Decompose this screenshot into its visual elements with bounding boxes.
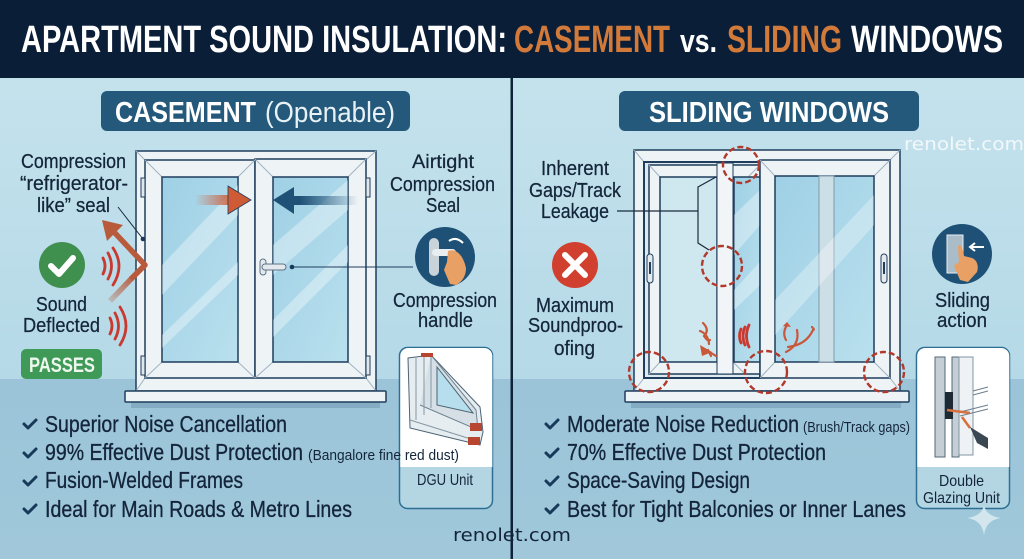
handle leader line xyxy=(290,265,413,269)
label: sound deflected: Sound xyxy=(36,294,87,316)
label: compression seal xyxy=(20,151,128,217)
sliding window xyxy=(625,150,909,408)
icon: compression handle xyxy=(415,227,475,287)
title banner: vs. xyxy=(680,23,717,59)
label: inherent gaps: Gaps/Track xyxy=(529,180,622,202)
arrow: deflected sound xyxy=(102,220,145,301)
icon: sound waves upper xyxy=(103,248,119,285)
label: maximum soundproofing xyxy=(528,295,623,360)
title banner: SLIDING xyxy=(727,19,842,61)
card: double glazing unit xyxy=(916,348,1010,508)
card: DGU unit: DGU Unit xyxy=(417,472,473,489)
feature list: sliding: 70% Effective Dust Protection xyxy=(567,439,826,465)
label: maximum soundproofing: Maximum xyxy=(536,295,614,317)
label: airtight seal: Airtight xyxy=(412,152,475,173)
arrow: blue compression arrow xyxy=(273,187,358,214)
feature list: casement: Superior Noise Cancellation xyxy=(45,411,287,437)
label: compression handle: Compression xyxy=(393,290,497,312)
panel: casement xyxy=(20,91,497,522)
label: sound deflected: Deflected xyxy=(23,315,100,337)
label: sound deflected xyxy=(23,294,100,337)
watermark: top right: renolet.com xyxy=(904,134,1024,155)
title banner xyxy=(0,0,1024,78)
badge: passes xyxy=(21,349,102,379)
feature list: sliding: Space-Saving Design xyxy=(567,467,750,493)
casement window xyxy=(125,151,386,408)
label: sliding action xyxy=(935,290,990,332)
feature list: sliding: Best for Tight Balconies or Inner Lanes xyxy=(567,496,906,522)
label: airtight seal: Compression xyxy=(390,174,495,196)
label: inherent gaps: Inherent xyxy=(541,158,609,180)
feature list: casement: Fusion-Welded Frames xyxy=(45,467,243,493)
leak markers: dashed circles xyxy=(629,147,904,393)
label: inherent gaps: Leakage xyxy=(541,201,609,223)
label: sliding action: action xyxy=(937,310,987,332)
feature list: casement: 99% Effective Dust Protection xyxy=(45,439,303,465)
title banner: APARTMENT SOUND INSULATION: xyxy=(21,19,507,61)
icon: sliding action xyxy=(932,224,992,284)
feature list: casement: Ideal for Main Roads & Metro Lines xyxy=(45,496,352,522)
casement heading: CASEMENT xyxy=(115,97,256,129)
window handle xyxy=(260,259,286,275)
label: inherent gaps xyxy=(529,158,622,223)
icon: sparkle xyxy=(967,505,1001,535)
label: maximum soundproofing: ofing xyxy=(554,338,595,360)
label: compression seal: like” seal xyxy=(37,195,110,217)
feature list: casement xyxy=(24,411,459,522)
arrow: red compression arrow xyxy=(195,186,251,214)
casement heading xyxy=(101,91,410,131)
label: airtight seal: Seal xyxy=(426,195,460,217)
icon: sound waves lower xyxy=(110,307,126,345)
feature list: sliding xyxy=(546,411,910,522)
label: compression handle xyxy=(393,290,497,332)
label: maximum soundproofing: Soundproo- xyxy=(528,315,623,337)
icon: green check xyxy=(39,242,85,288)
watermark: bottom centre: renolet.com xyxy=(453,525,571,546)
label: compression handle: handle xyxy=(418,310,473,332)
label: compression seal: Compression xyxy=(21,151,126,173)
center divider xyxy=(510,78,513,559)
card: double glazing unit: Glazing Unit xyxy=(923,490,1000,507)
label: compression seal: “refrigerator- xyxy=(20,173,128,195)
title banner: CASEMENT xyxy=(514,19,670,61)
feature list: sliding: Moderate Noise Reduction xyxy=(567,411,799,437)
card: DGU unit xyxy=(400,348,492,508)
feature list: casement: (Bangalore fine red dust) xyxy=(308,447,459,464)
card: double glazing unit: Double xyxy=(939,473,984,490)
badge: passes: PASSES xyxy=(29,354,95,377)
label: airtight seal xyxy=(390,152,495,217)
seal callout line xyxy=(118,207,145,241)
sliding heading: SLIDING WINDOWS xyxy=(649,97,889,129)
feature list: sliding: (Brush/Track gaps) xyxy=(803,419,910,436)
casement heading: (Openable) xyxy=(265,97,395,129)
label: sliding action: Sliding xyxy=(935,290,990,312)
icon: air and noise leakage xyxy=(700,322,814,356)
icon: red cross xyxy=(552,242,598,288)
leakage callout line xyxy=(617,177,716,250)
panel: sliding xyxy=(528,91,1010,522)
